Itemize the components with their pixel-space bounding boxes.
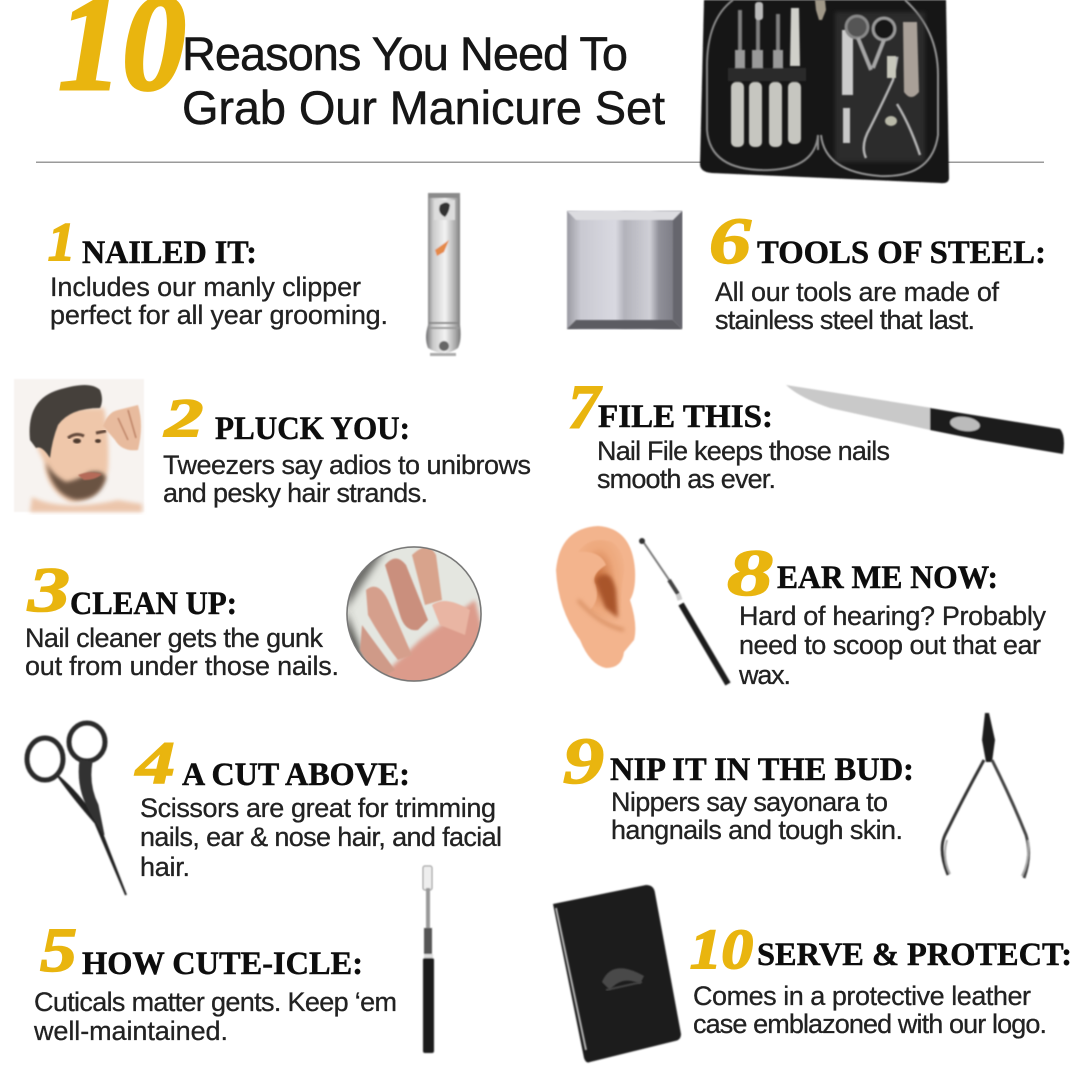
item 8: ear me now bbox=[556, 526, 1046, 690]
description: out from under those nails. bbox=[25, 651, 339, 681]
header divider bbox=[36, 162, 1044, 163]
heading: A CUT ABOVE: bbox=[182, 757, 410, 793]
description: Includes our manly clipper bbox=[50, 272, 361, 302]
number 10: 10 bbox=[690, 919, 753, 981]
item 7: file this bbox=[568, 374, 1064, 494]
heading: HOW CUTE-ICLE: bbox=[82, 946, 363, 982]
item 2: pluck you bbox=[14, 379, 531, 512]
item 4: a cut above bbox=[27, 723, 502, 895]
icon: ear scoop tool bbox=[639, 538, 728, 684]
description: and pesky hair strands. bbox=[163, 478, 428, 508]
heading: PLUCK YOU: bbox=[215, 411, 410, 447]
heading: FILE THIS: bbox=[598, 399, 773, 435]
description: All our tools are made of bbox=[715, 277, 999, 307]
description bbox=[693, 981, 1047, 1039]
title bbox=[182, 27, 665, 134]
number 6: 6 bbox=[709, 205, 751, 278]
icon: nail clipper bbox=[426, 193, 461, 356]
description: need to scoop out that ear bbox=[739, 630, 1041, 660]
description: case emblazoned with our logo. bbox=[693, 1009, 1047, 1039]
number 5: 5 bbox=[40, 917, 77, 985]
heading: NAILED IT: bbox=[82, 235, 257, 271]
item 5: how cute-icle bbox=[33, 866, 434, 1053]
heading: TOOLS OF STEEL: bbox=[757, 235, 1046, 271]
heading: NIP IT IN THE BUD: bbox=[610, 752, 914, 788]
heading: EAR ME NOW: bbox=[777, 560, 998, 596]
icon: scissors bbox=[27, 723, 126, 895]
number 3: 3 bbox=[27, 554, 70, 625]
item 6: tools of steel bbox=[567, 205, 1046, 335]
description: Hard of hearing? Probably bbox=[739, 601, 1046, 631]
icon: ear bbox=[556, 526, 635, 668]
description: nails, ear & nose hair, and facial bbox=[140, 822, 502, 852]
item 9: nip it in the bud bbox=[563, 713, 1029, 878]
description: hangnails and tough skin. bbox=[611, 815, 903, 845]
photo: hand in circle bbox=[346, 546, 482, 682]
description: well-maintained. bbox=[33, 1016, 228, 1046]
description: Comes in a protective leather bbox=[693, 981, 1031, 1011]
number 8: 8 bbox=[727, 537, 773, 610]
photo: man plucking eyebrow bbox=[14, 379, 144, 512]
description bbox=[25, 623, 339, 681]
description: Nail cleaner gets the gunk bbox=[25, 623, 324, 653]
description bbox=[163, 450, 531, 508]
description: smooth as ever. bbox=[597, 464, 776, 494]
icon: leather case bbox=[553, 885, 681, 1062]
icon: nail file bbox=[786, 385, 1064, 454]
description: stainless steel that last. bbox=[715, 305, 975, 335]
heading: SERVE & PROTECT: bbox=[757, 937, 1072, 973]
number 1: 1 bbox=[48, 212, 75, 272]
number 9: 9 bbox=[563, 725, 604, 798]
icon: cuticle nippers bbox=[942, 713, 1029, 878]
description bbox=[50, 272, 388, 330]
title: Reasons You Need To bbox=[182, 27, 628, 80]
description bbox=[611, 787, 903, 845]
item 1: nailed it bbox=[48, 193, 461, 356]
description: hair. bbox=[140, 852, 190, 882]
description bbox=[738, 601, 1046, 690]
number 7: 7 bbox=[568, 374, 603, 442]
number 2: 2 bbox=[164, 388, 203, 448]
description: perfect for all year grooming. bbox=[50, 300, 388, 330]
description: wax. bbox=[738, 660, 791, 690]
description: Scissors are great for trimming bbox=[140, 793, 496, 823]
description: Nail File keeps those nails bbox=[597, 436, 890, 466]
photo: open manicure set case bbox=[700, 0, 949, 183]
number 4: 4 bbox=[135, 730, 175, 796]
description bbox=[140, 793, 502, 882]
description bbox=[33, 987, 397, 1046]
description bbox=[715, 277, 999, 335]
description bbox=[597, 436, 890, 494]
title: Grab Our Manicure Set bbox=[182, 81, 665, 134]
item 10: serve and protect bbox=[553, 885, 1072, 1062]
icon: cuticle pusher bbox=[423, 866, 434, 1053]
description: Cuticals matter gents. Keep ‘em bbox=[34, 987, 397, 1017]
icon: steel square bbox=[567, 211, 682, 329]
heading: CLEAN UP: bbox=[70, 586, 237, 622]
description: Nippers say sayonara to bbox=[611, 787, 888, 817]
description: Tweezers say adios to unibrows bbox=[163, 450, 531, 480]
item 3: clean up bbox=[26, 546, 482, 682]
